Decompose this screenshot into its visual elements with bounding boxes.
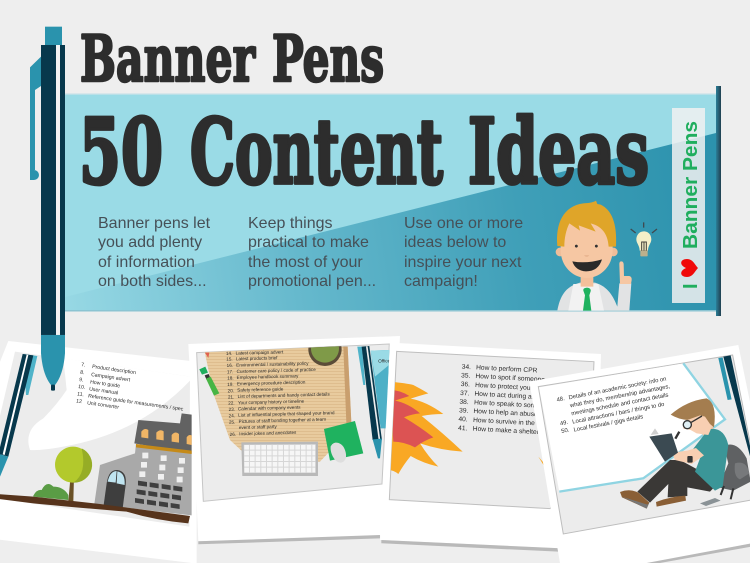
text: items 14 to 26: Pictures of staff bonding together at a team xyxy=(239,417,326,424)
title: Banner Pens: Banner xyxy=(80,22,256,97)
text: items 48 to 50: meetings schedule and contact details xyxy=(571,393,669,417)
text block: intro column 1: you add plenty xyxy=(98,234,202,251)
text block: intro column 3: ideas below to xyxy=(404,234,506,251)
text: items 34 to 41: 41. xyxy=(458,425,468,432)
highlighter xyxy=(199,367,219,396)
text: items 34 to 41: How to protect yourself xyxy=(475,382,543,393)
text: items 14 to 26: 15. xyxy=(226,356,233,362)
text: items 7 to 12: 9. xyxy=(79,377,84,384)
text: items 34 to 41: 38. xyxy=(459,399,469,406)
banner right rod xyxy=(716,86,721,316)
ground xyxy=(0,494,190,523)
text: items 14 to 26 xyxy=(226,349,335,437)
barrel xyxy=(41,45,65,335)
banner panel xyxy=(65,93,716,312)
icon: large pen xyxy=(30,27,65,391)
text: items 7 to 12: 12 xyxy=(76,398,82,405)
text: items 14 to 26: Latest products brief xyxy=(236,355,278,361)
ears xyxy=(556,248,618,256)
mini pen xyxy=(357,346,382,458)
text block: intro column 2: promotional pen... xyxy=(248,273,376,290)
tie xyxy=(583,288,591,311)
text: items 14 to 26: 22. xyxy=(228,400,235,406)
text block: intro column 3: campaign! xyxy=(404,273,478,290)
text: items 34 to 41: 34. xyxy=(462,364,471,371)
text: items 7 to 12: Reference guide for measurements / spec xyxy=(88,393,184,413)
text block: intro column 2: Keep things xyxy=(248,215,333,232)
text: items 34 to 41: 39. xyxy=(459,407,469,415)
text: items 14 to 26: 21. xyxy=(228,394,234,400)
eyes xyxy=(575,245,598,248)
side label: I love Banner Pens: I xyxy=(680,283,702,289)
cap xyxy=(45,27,62,45)
text block: intro column 2: the most of your xyxy=(248,254,363,271)
mini pen xyxy=(718,355,750,456)
neck xyxy=(581,273,593,287)
icon: smiling businessman pointing xyxy=(556,201,632,311)
text: items 34 to 41: How to make a shelter xyxy=(473,426,540,436)
text: items 7 to 12: 8. xyxy=(80,370,85,376)
text: items 14 to 26: List of influential people that shaped your brand xyxy=(238,410,335,418)
text: items 14 to 26: Emergency procedure description xyxy=(237,380,306,386)
text: items 14 to 26: 19. xyxy=(227,382,234,387)
plant xyxy=(308,346,342,366)
text: items 14 to 26: 18. xyxy=(227,375,234,381)
shoes xyxy=(620,490,686,509)
mouth xyxy=(572,259,602,271)
hair xyxy=(671,398,715,427)
text block: intro column 2: practical to make xyxy=(248,234,369,251)
text: items 14 to 26: Latest campaign advert xyxy=(236,349,284,356)
legs xyxy=(637,460,717,503)
text: items 48 to 50: 49. xyxy=(560,420,569,427)
text: items 14 to 26: Insider jokes and anecdotes xyxy=(239,430,297,436)
text block: intro column 3: inspire your next xyxy=(404,254,522,271)
pin xyxy=(205,353,209,358)
flame xyxy=(388,382,550,474)
text: items 14 to 26: Environmental / sustainability policy xyxy=(236,361,309,368)
text: items 14 to 26: 20. xyxy=(228,388,234,393)
text: items 7 to 12: User manual xyxy=(89,386,118,396)
text: items 48 to 50: 48. xyxy=(556,396,566,404)
text: items 34 to 41: 36. xyxy=(461,381,470,388)
text: items 34 to 41: How to spot if someone xyxy=(475,373,545,384)
text: items 14 to 26: Calendar with company events xyxy=(238,405,301,411)
text: items 14 to 26: 24. xyxy=(229,413,235,418)
text: items 14 to 26: 14. xyxy=(226,351,232,356)
text: items 14 to 26: 23. xyxy=(229,407,235,412)
text: items 14 to 26: Safety reference guide xyxy=(237,386,284,393)
text: items 48 to 50: Local festivals / gigs details xyxy=(573,414,644,434)
text: items 14 to 26: Your company history or timeline xyxy=(238,399,305,405)
title: 50 Content Ideas: Ideas xyxy=(468,99,649,205)
illustration: student reading xyxy=(620,398,750,509)
photo card 1: product ideas xyxy=(0,341,197,563)
pointing hand xyxy=(619,261,632,284)
text: items 34 to 41: 40. xyxy=(458,416,468,423)
tree xyxy=(33,447,92,502)
photo card 4: academic and local xyxy=(529,345,750,563)
text block: intro column 3: Use one or more xyxy=(404,215,523,232)
text: items 14 to 26: List of departments and handy contact details xyxy=(238,392,330,399)
photo card 3: how-to guides xyxy=(380,343,601,552)
side label: I love Banner Pens: Banner Pens xyxy=(680,121,702,249)
mini banner edge xyxy=(371,350,391,428)
text: items 48 to 50 xyxy=(556,376,671,435)
text: items 34 to 41: How to perform CPR xyxy=(476,364,538,375)
shirt xyxy=(557,283,631,311)
keyboard xyxy=(241,442,318,476)
tip xyxy=(41,335,65,385)
text: items 14 to 26: 16. xyxy=(227,363,233,368)
title: 50 Content Ideas: 50 xyxy=(79,99,163,205)
photo card 2: company documents xyxy=(188,333,400,544)
magazine on floor xyxy=(700,498,721,506)
clip xyxy=(30,57,41,180)
backpack xyxy=(718,445,750,499)
text: items 7 to 12: 10. xyxy=(78,384,86,391)
text: items 7 to 12: 7. xyxy=(81,362,86,369)
face xyxy=(561,222,613,278)
text: items 14 to 26: 26. xyxy=(230,432,236,437)
text block: intro column 1: Banner pens let xyxy=(98,215,211,232)
text block: intro column 1: on both sides... xyxy=(98,273,207,290)
text: items 48 to 50: Local attractions / bars / things to do xyxy=(572,402,665,426)
side label: I love Banner Pens xyxy=(672,108,705,303)
text: items 14 to 26: 17. xyxy=(227,369,233,374)
title: 50 Content Ideas: Content xyxy=(190,99,443,205)
watch xyxy=(687,456,693,463)
glasses xyxy=(683,416,702,429)
building xyxy=(94,413,192,515)
text: items 48 to 50: Details of an academic society: info on xyxy=(568,376,667,401)
torso xyxy=(692,429,728,491)
text: items 34 to 41: How to help an abused xyxy=(473,408,542,419)
neck xyxy=(700,423,715,442)
mini banner edge: Office xyxy=(378,358,391,364)
icon: light bulb xyxy=(631,222,657,256)
hair xyxy=(557,201,616,247)
text: items 7 to 12: Product description xyxy=(92,364,136,376)
white backdrop xyxy=(539,363,725,492)
text: items 7 to 12: Campaign advert xyxy=(91,372,131,384)
text: items 7 to 12: Unit converter xyxy=(87,400,120,411)
arm xyxy=(672,448,704,464)
nib xyxy=(51,385,55,391)
text: items 34 to 41 xyxy=(458,364,551,436)
text: items 34 to 41: How to speak to someone xyxy=(474,399,551,410)
title: Banner Pens: Pens xyxy=(272,22,384,97)
text: items 7 to 12 xyxy=(76,362,184,413)
text: items 34 to 41: How to survive in the wild xyxy=(473,417,549,428)
head xyxy=(683,411,713,435)
text: items 34 to 41: 37. xyxy=(460,390,470,397)
text: items 34 to 41: 35. xyxy=(461,372,471,380)
text: items 14 to 26: Employee handbook summary xyxy=(237,373,299,380)
text: items 14 to 26: Customer care policy / code of practice xyxy=(237,367,316,374)
text: items 14 to 26: 25. xyxy=(229,419,235,425)
text: items 48 to 50: what they do, membership advantages, xyxy=(569,384,671,409)
text: items 34 to 41: How to act during an xyxy=(474,391,536,401)
text: items 14 to 26: event or staff party xyxy=(239,424,278,430)
mouse pad and mouse xyxy=(324,421,363,463)
text: items 7 to 12: 11. xyxy=(77,391,84,398)
text: items 7 to 12: How to guide xyxy=(90,379,120,390)
book xyxy=(649,428,679,462)
text block: intro column 1: of information xyxy=(98,254,195,271)
notepaper xyxy=(204,347,352,462)
text: items 48 to 50: 50. xyxy=(561,427,570,435)
mini pen xyxy=(0,354,37,477)
nose xyxy=(584,255,589,257)
